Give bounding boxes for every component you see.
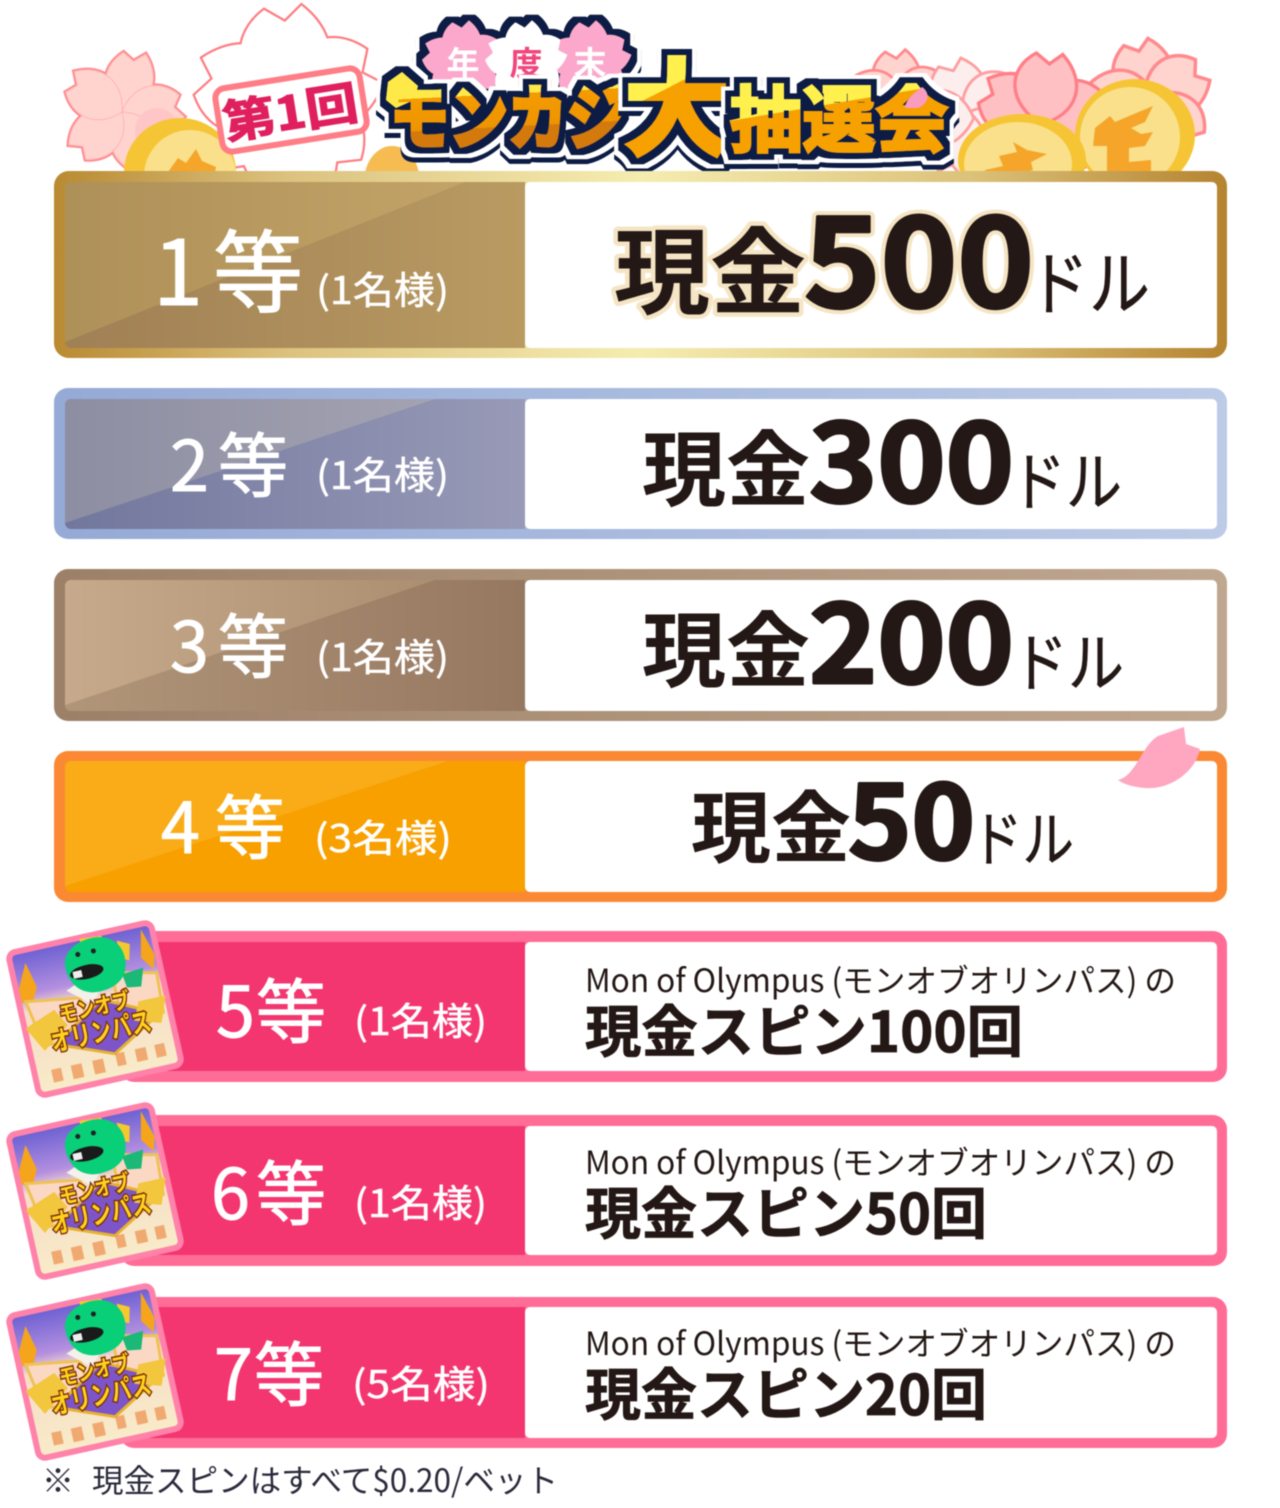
prize: 300 dollars: 現金: [642, 404, 810, 523]
white prize area: [525, 1126, 1217, 1255]
thumbnail: Mon of Olympus: オリンパス: [47, 1000, 155, 1060]
prize: 300 dollars: 300: [809, 378, 1014, 534]
coin: far right: [1075, 79, 1195, 191]
flower: large white behind badge: [184, 6, 391, 204]
thumbnail: Mon of Olympus: [8, 1104, 182, 1278]
frame: [54, 388, 1227, 539]
prize row 4: [54, 727, 1227, 902]
prize: 500 dollars: 500: [804, 166, 1034, 343]
game name: Mon of Olympus (モンオブオリンパス) の: [585, 956, 1176, 1002]
frame: [54, 171, 1227, 358]
rank text: 7等: [214, 1320, 324, 1421]
winner count: (3名様): [314, 808, 452, 863]
logo: nendomatsu flowers: 年: [446, 37, 480, 85]
frame: [54, 751, 1227, 902]
rank text: 3等: [170, 592, 288, 693]
prize: 200 dollars: [642, 559, 1124, 715]
prize: 50 dollars: [691, 742, 1074, 889]
prize: 500 dollars: ドル: [1028, 229, 1150, 330]
logo: dai: 大: [625, 25, 729, 176]
prize: 300 dollars: ドル: [1010, 432, 1122, 524]
white prize area: [525, 942, 1217, 1071]
thumbnail: Mon of Olympus: モンオブ: [56, 1165, 133, 1211]
rank text: 4等: [161, 773, 285, 874]
logo: nendomatsu flowers: [417, 20, 635, 108]
thumbnail: Mon of Olympus: モンオブ: [56, 983, 133, 1029]
thumbnail: Mon of Olympus: モンオブ: [56, 1346, 133, 1392]
prize: 20 cash spins: 現金スピン20回: [585, 1351, 987, 1432]
game name: Mon of Olympus (モンオブオリンパス) の: [585, 1319, 1176, 1365]
thumbnail: Mon of Olympus: [8, 922, 182, 1096]
white prize area: [525, 399, 1217, 529]
frame: [120, 931, 1227, 1082]
prize: 200 dollars: 200: [809, 559, 1014, 715]
prize row 5: [8, 922, 1227, 1096]
logo: monkaji: モンカジ: [390, 63, 626, 164]
rank panel: [65, 182, 525, 348]
prize: 50 dollars: 50: [848, 742, 975, 889]
frame: [120, 1115, 1227, 1266]
white prize area: [525, 182, 1217, 348]
footnote: ※: [42, 1456, 74, 1502]
prize row 2: [54, 378, 1227, 539]
prize: 300 dollars: [642, 378, 1122, 534]
rank panel: [65, 580, 525, 711]
prize row 3: [54, 559, 1227, 721]
winner count: (1名様): [354, 1173, 487, 1228]
rank text: 2等: [170, 411, 288, 512]
rank panel: [150, 1307, 525, 1438]
winner count: (1名様): [316, 445, 449, 500]
prize: 200 dollars: ドル: [1012, 613, 1124, 705]
rank panel: [150, 942, 525, 1071]
flower: left pale: [57, 46, 185, 178]
thumbnail: Mon of Olympus: オリンパス: [47, 1182, 155, 1242]
rank text: 1等: [153, 201, 303, 331]
rank panel: [150, 1126, 525, 1255]
icon: petal on logo: [905, 87, 928, 108]
game name: Mon of Olympus (モンオブオリンパス) の: [585, 1138, 1176, 1184]
flower: right white: [907, 53, 1033, 185]
flower: far right pale: [1083, 35, 1219, 172]
prize: 500 digits heavy core: 500: [804, 166, 1034, 343]
thumbnail: Mon of Olympus: [8, 1285, 182, 1459]
white prize area: [525, 1307, 1217, 1438]
prize: 200 dollars: 現金: [642, 585, 810, 704]
coin: right front: [958, 114, 1086, 206]
prize: 50 dollars: 現金: [691, 767, 851, 879]
winner count: (1名様): [354, 991, 487, 1046]
winner count: (1名様): [316, 627, 449, 682]
icon: falling petal: [1118, 727, 1200, 788]
logo: nendomatsu flowers: 度: [510, 37, 542, 85]
prize row 6: [8, 1104, 1227, 1278]
frame: [120, 1297, 1227, 1448]
logo: chusenkai: 抽選会: [730, 62, 948, 167]
prize: 500 dollars: [614, 166, 1150, 343]
coin: behind logo: [364, 146, 420, 218]
prize: 50 dollars: ドル: [971, 792, 1074, 879]
rank text: 6等: [211, 1139, 326, 1240]
flower: right small: [842, 50, 953, 125]
badge: dai 1 kai: 第1回: [218, 67, 362, 153]
winner count: (1名様): [316, 260, 449, 315]
white prize area: [525, 580, 1217, 711]
prize row 7: [8, 1285, 1227, 1459]
winner count: (5名様): [352, 1354, 490, 1409]
prize: 100 cash spins: 現金スピン100回: [585, 988, 1023, 1069]
footnote: 現金スピンはすべて$0.20/ベット: [92, 1456, 558, 1502]
prize row 1: [54, 166, 1227, 358]
header: sakura, coins and logo: [57, 6, 1219, 226]
flower: right pink: [968, 47, 1112, 190]
rank panel: [65, 761, 525, 892]
prize: 500 dollars: 現金: [614, 198, 806, 334]
rank text: 5等: [216, 957, 326, 1058]
coin: left: [124, 118, 236, 226]
logo: nendomatsu flowers: 末: [574, 37, 606, 85]
white prize area: [525, 761, 1217, 892]
prize: 50 cash spins: 現金スピン50回: [585, 1170, 987, 1251]
frame: [54, 569, 1227, 721]
rank panel: [65, 399, 525, 529]
thumbnail: Mon of Olympus: オリンパス: [47, 1363, 155, 1423]
